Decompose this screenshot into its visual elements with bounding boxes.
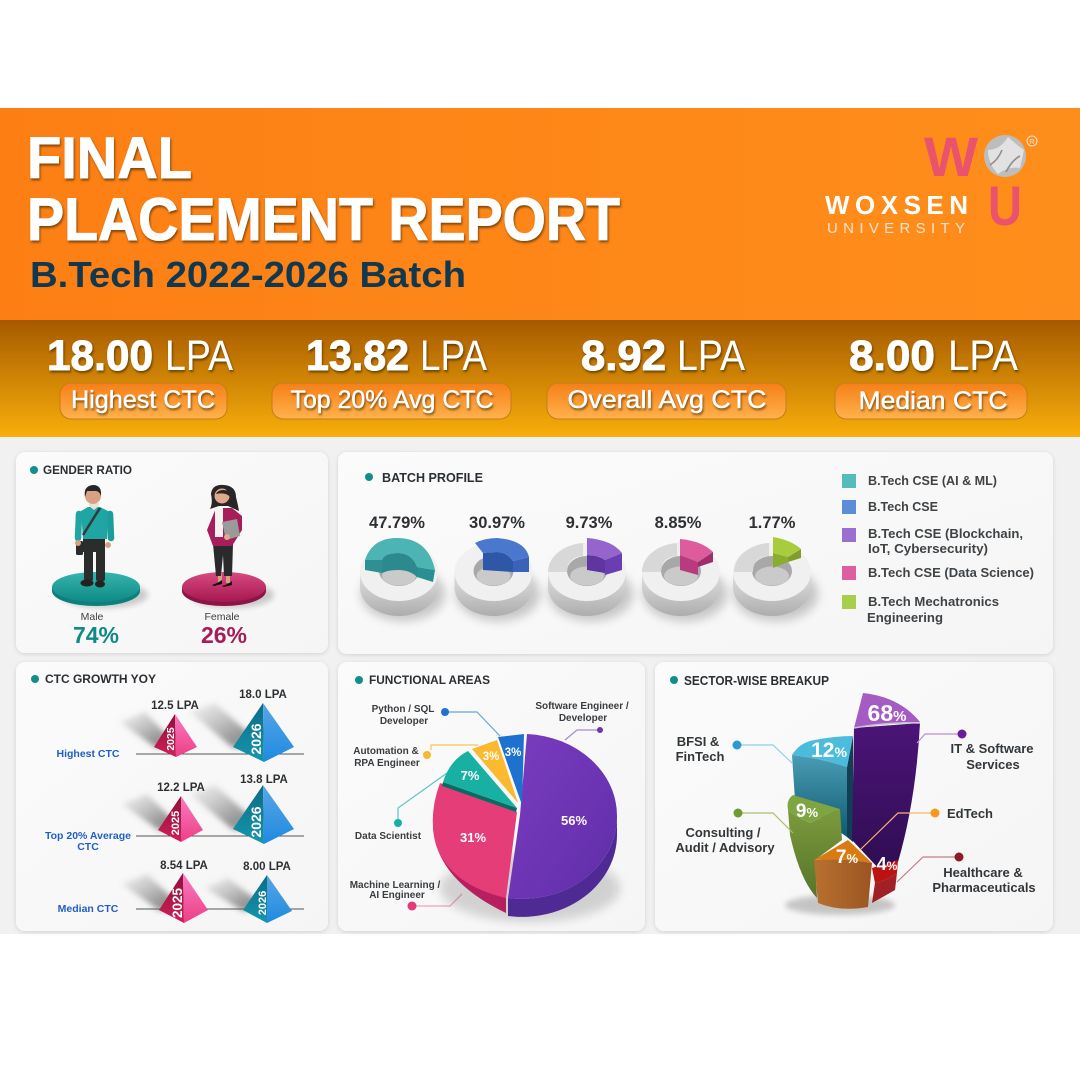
leader lines and labels	[675, 730, 1036, 895]
pie chart: 7%	[461, 768, 480, 783]
donut: 47.79% AI and ML	[360, 514, 445, 621]
donut: 9.73% blockchain	[548, 514, 633, 621]
donut: 8.85% data science: 8.85%	[655, 514, 702, 532]
legend: B.Tech CSE (AI & ML)	[868, 474, 997, 488]
leader lines and labels: Consulting /	[685, 825, 761, 840]
pie chart: 56%	[561, 813, 587, 828]
label: male 74%: 74%	[73, 622, 119, 648]
legend: IoT, Cybersecurity)	[868, 542, 988, 556]
icon: male figure on platform	[52, 485, 148, 608]
dashboard background	[0, 437, 1080, 934]
3D sector chart	[785, 693, 920, 915]
chart row: top 20% average CTC: 12.2 LPA	[157, 782, 205, 794]
title: PLACEMENT REPORT	[27, 186, 620, 253]
legend: B.Tech Mechatronics	[868, 595, 999, 609]
heading: batch profile: BATCH PROFILE	[382, 470, 483, 485]
KPI strip	[0, 320, 1080, 437]
heading: functional areas: FUNCTIONAL AREAS	[369, 673, 490, 687]
leader lines and labels: Machine Learning /	[350, 880, 441, 891]
KPI: highest CTC	[47, 332, 233, 419]
chart row: highest CTC: 18.0 LPA	[239, 689, 287, 701]
leader lines and labels: Audit / Advisory	[675, 840, 775, 855]
KPI: top 20% average CTC: Top 20% Avg CTC	[290, 386, 494, 414]
chart row: highest CTC: 2025	[165, 727, 177, 751]
logo: Woxsen University: R	[1029, 137, 1035, 146]
leader lines and labels: Software Engineer /	[535, 701, 629, 712]
chart row: median CTC: 8.00 LPA	[243, 861, 291, 873]
3D sector chart: 4%	[877, 854, 898, 874]
label: female 26%: Female	[204, 611, 240, 623]
chart row: highest CTC: 12.5 LPA	[151, 700, 199, 712]
pie chart	[433, 734, 620, 922]
panel: batch profile	[338, 452, 1053, 654]
KPI: highest CTC: Highest CTC	[71, 386, 215, 414]
chart row: top 20% average CTC	[45, 774, 304, 853]
header banner	[0, 108, 1080, 320]
KPI: overall average CTC: Overall Avg CTC	[568, 386, 766, 414]
leader lines and labels: IT & Software	[950, 741, 1034, 756]
pie chart: 3%	[505, 747, 521, 759]
chart row: median CTC: 2026	[257, 891, 269, 915]
chart row: highest CTC: Highest CTC	[56, 748, 120, 760]
legend: Engineering	[867, 611, 943, 625]
leader lines and labels: RPA Engineer	[354, 758, 420, 769]
chart row: median CTC: 2025	[170, 887, 185, 918]
chart row: median CTC	[58, 860, 304, 923]
KPI: overall average CTC: 8.92	[581, 332, 666, 380]
legend: B.Tech CSE (Blockchain,	[868, 527, 1023, 541]
donut: 30.97% CSE: 30.97%	[469, 514, 525, 532]
heading: CTC growth: CTC GROWTH YOY	[45, 672, 156, 686]
3D sector chart: 9%	[796, 801, 819, 822]
chart row: median CTC: Median CTC	[58, 903, 119, 915]
logo: Woxsen University: UNIVERSITY	[827, 220, 965, 237]
leader lines and labels: Automation &	[353, 746, 419, 757]
label: female 26%: 26%	[201, 622, 247, 648]
leader lines and labels	[350, 701, 629, 910]
leader lines and labels: Services	[966, 757, 1020, 772]
KPI: highest CTC: 18.00	[47, 332, 153, 380]
KPI: overall average CTC	[547, 332, 786, 419]
icon: female figure on platform	[182, 485, 274, 608]
leader lines and labels: Pharmaceuticals	[932, 880, 1036, 895]
KPI: median CTC: LPA	[948, 332, 1018, 380]
KPI: overall average CTC: LPA	[677, 332, 745, 380]
leader lines and labels: Developer	[380, 716, 428, 727]
donut: 8.85% data science	[642, 514, 727, 621]
chart row: top 20% average CTC: Top 20% Average	[45, 830, 131, 842]
leader lines and labels: Python / SQL	[372, 704, 434, 715]
KPI: median CTC: Median CTC	[858, 387, 1008, 415]
KPI: top 20% average CTC: 13.82	[306, 332, 409, 380]
title: FINAL	[27, 126, 192, 191]
leader lines and labels: AI Engineer	[369, 890, 425, 901]
pie chart: 3%	[483, 751, 499, 763]
donut: 1.77% mechatronics	[733, 514, 818, 621]
subtitle: B.Tech 2022-2026 Batch	[30, 254, 466, 295]
leader lines and labels: FinTech	[676, 749, 724, 764]
chart row: median CTC: 8.54 LPA	[160, 860, 208, 872]
leader lines and labels: EdTech	[947, 806, 993, 821]
chart row: top 20% average CTC: CTC	[77, 841, 99, 853]
chart row: top 20% average CTC: 13.8 LPA	[240, 774, 288, 786]
heading: gender ratio: GENDER RATIO	[43, 463, 132, 477]
panel: CTC growth YoY	[16, 662, 328, 931]
title	[27, 126, 620, 253]
legend	[842, 474, 1034, 625]
chart row: top 20% average CTC: 2026	[248, 806, 264, 838]
KPI: top 20% average CTC: LPA	[420, 332, 487, 380]
3D sector chart: 12%	[811, 739, 847, 762]
legend: B.Tech CSE	[868, 500, 938, 514]
leader lines and labels: Developer	[559, 713, 607, 724]
chart row: highest CTC	[56, 689, 304, 762]
donut: 9.73% blockchain: 9.73%	[566, 514, 613, 532]
logo: Woxsen University	[825, 125, 1037, 237]
KPI: highest CTC: LPA	[165, 332, 233, 380]
leader lines and labels: Data Scientist	[355, 831, 422, 842]
donut: 47.79% AI and ML: 47.79%	[369, 514, 425, 532]
panel: functional areas	[338, 662, 645, 931]
logo: Woxsen University: W	[924, 125, 978, 188]
KPI: median CTC: 8.00	[849, 332, 935, 380]
donut: 30.97% CSE	[454, 514, 540, 621]
leader lines and labels: BFSI &	[677, 734, 719, 749]
logo: Woxsen University: U	[988, 174, 1022, 237]
heading: sector-wise breakup: SECTOR-WISE BREAKUP	[684, 674, 829, 688]
donut: 1.77% mechatronics: 1.77%	[749, 514, 796, 532]
leader lines and labels: Healthcare &	[943, 865, 1023, 880]
panel: gender ratio	[16, 452, 328, 653]
pie chart: 31%	[460, 830, 486, 845]
legend: B.Tech CSE (Data Science)	[868, 566, 1034, 580]
chart row: top 20% average CTC: 2025	[170, 811, 182, 835]
label: male 74%: Male	[81, 611, 104, 623]
3D sector chart: 7%	[836, 847, 859, 868]
3D sector chart: 68%	[868, 700, 906, 726]
logo: Woxsen University: WOXSEN	[825, 190, 968, 220]
KPI: top 20% average CTC	[272, 332, 511, 419]
KPI: median CTC	[835, 332, 1027, 419]
panel: sector-wise breakup	[655, 662, 1053, 931]
chart row: highest CTC: 2026	[248, 723, 264, 755]
